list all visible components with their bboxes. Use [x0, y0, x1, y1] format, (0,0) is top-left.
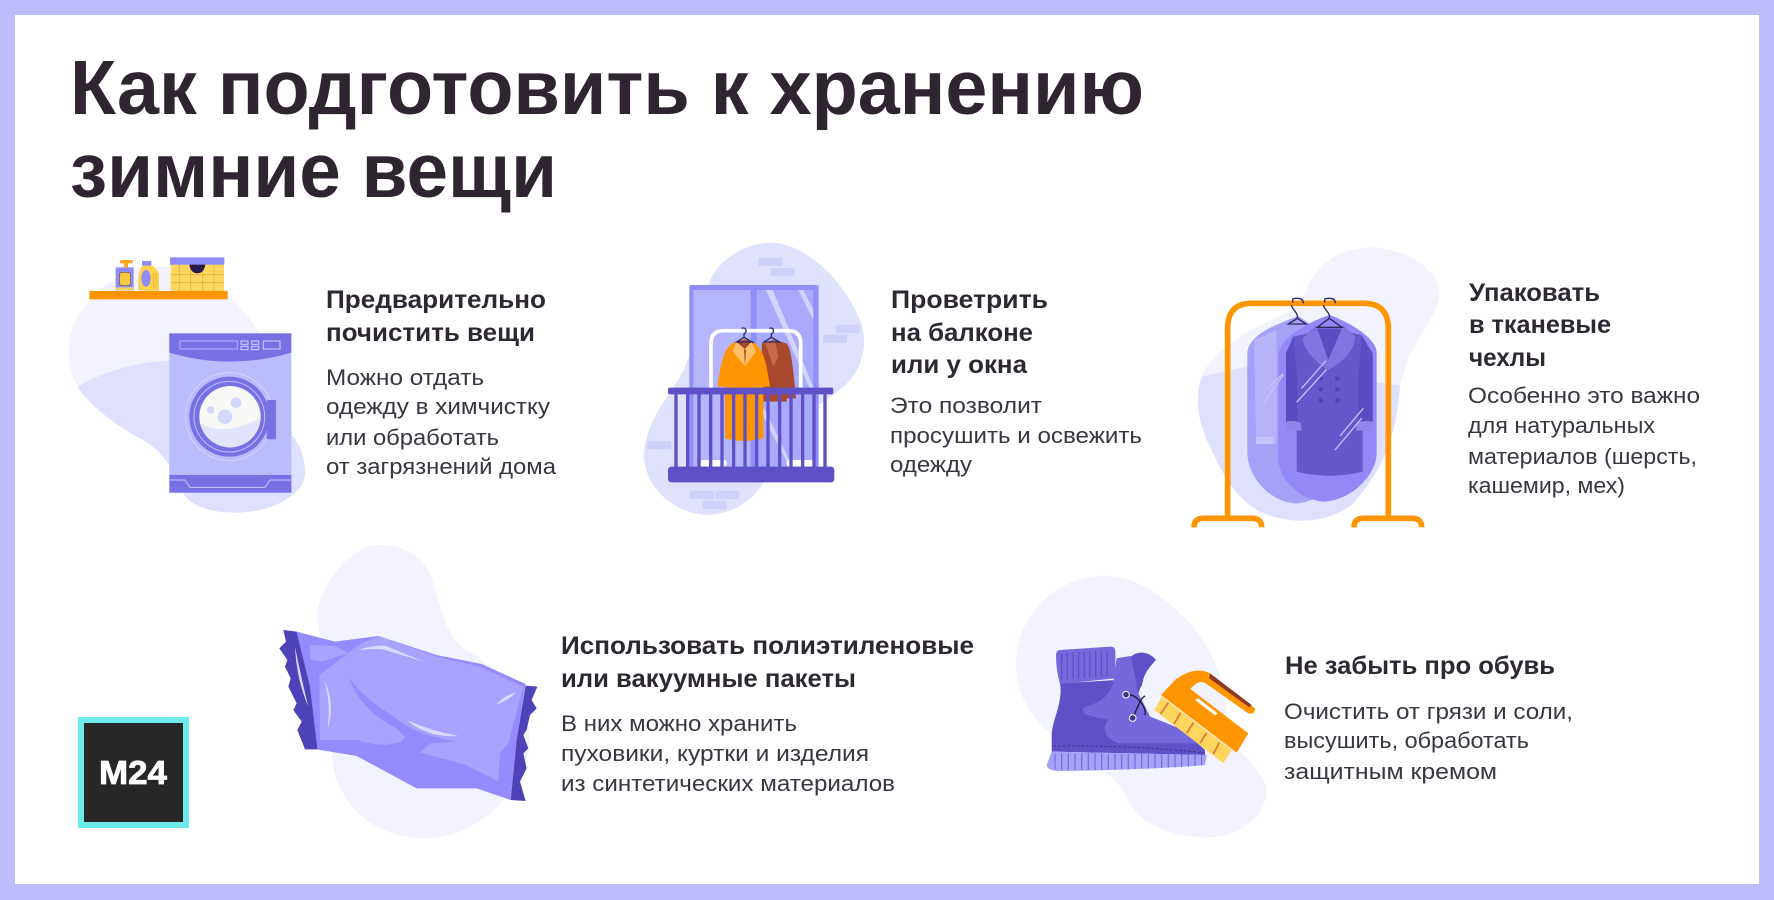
title: зимние вещи [70, 128, 557, 214]
text: cleaning [326, 286, 557, 479]
text: covers: Особенно это важно [1468, 383, 1700, 408]
text: covers: кашемир, мех) [1468, 473, 1625, 498]
text: airing: Это позволит [890, 393, 1042, 418]
text: covers: в тканевые [1469, 311, 1611, 339]
text: cleaning: от загрязнений дома [326, 454, 557, 479]
text: shoes: Очистить от грязи и соли, [1284, 699, 1573, 724]
text: airing [890, 286, 1142, 477]
text: bags: пуховики, куртки и изделия [561, 741, 869, 766]
panel: bags [279, 545, 974, 838]
title [70, 45, 1144, 214]
text: cleaning: Предварительно [326, 286, 546, 314]
text: covers: для натуральных [1468, 413, 1655, 438]
text: shoes: высушить, обработать [1284, 728, 1529, 753]
illustration: balcony with coats [644, 243, 864, 515]
text: bags: или вакуумные пакеты [561, 665, 856, 693]
title: Как подготовить к хранению [70, 45, 1144, 131]
text: airing: Проветрить [891, 286, 1048, 314]
illustration: washing machine and shelf [68, 257, 305, 513]
text: airing: или у окна [891, 351, 1028, 379]
text: bags [561, 632, 974, 796]
text: airing: просушить и освежить [890, 423, 1142, 448]
text: airing: одежду [890, 452, 972, 477]
panel: airing [644, 243, 1142, 515]
text: shoes: защитным кремом [1284, 759, 1497, 784]
text: cleaning: Можно отдать [326, 365, 484, 390]
panel: shoes [1016, 576, 1573, 837]
text: shoes: Не забыть про обувь [1285, 652, 1555, 680]
text: covers: Упаковать [1469, 279, 1600, 307]
text: bags: Использовать полиэтиленовые [561, 632, 974, 660]
text: covers: материалов (шерсть, [1468, 444, 1697, 469]
text: bags: В них можно хранить [561, 711, 797, 736]
illustration: boot and brush [1016, 576, 1267, 837]
text: covers: чехлы [1469, 344, 1546, 372]
panel: cleaning [68, 257, 557, 513]
text: shoes [1284, 652, 1573, 784]
logo: M24 [78, 717, 189, 828]
text: cleaning: почистить вещи [326, 319, 535, 347]
text: airing: на балконе [891, 319, 1033, 347]
text: bags: из синтетических материалов [561, 771, 895, 796]
text: covers [1468, 279, 1700, 498]
text: cleaning: или обработать [326, 425, 499, 450]
text: cleaning: одежду в химчистку [326, 394, 550, 419]
illustration: plastic vacuum bag [279, 545, 537, 838]
panel: covers [1194, 247, 1700, 527]
illustration: clothes rack with covers [1194, 247, 1439, 527]
logo: M24: M24 [99, 754, 168, 791]
